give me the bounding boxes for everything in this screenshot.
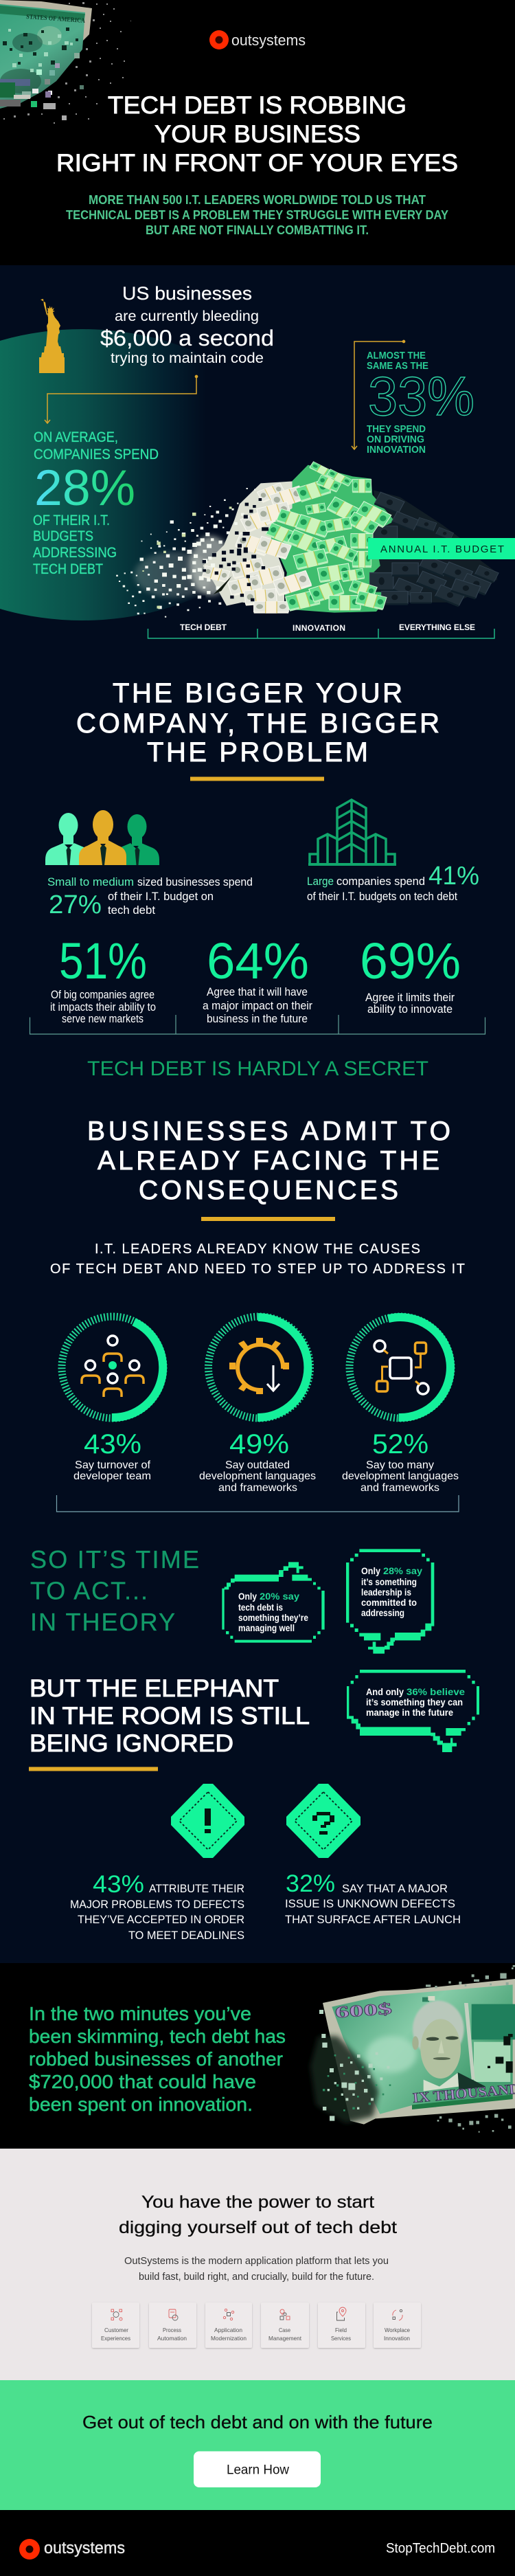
subheading: I.T. LEADERS ALREADY KNOW THE CAUSES bbox=[95, 1242, 420, 1257]
text: 27 percent: tech debt bbox=[108, 904, 155, 917]
text: 28 percent: COMPANIES SPEND bbox=[34, 447, 159, 462]
tile: case management: Management bbox=[268, 2335, 302, 2342]
stat: 49 percent outdated: and frameworks bbox=[218, 1482, 297, 1494]
text: platform description bbox=[124, 2256, 389, 2283]
heading: you have the power: You have the power to start bbox=[141, 2193, 374, 2212]
text: US businesses: US businesses bbox=[122, 283, 252, 304]
heading: so it's time to act: IN THEORY bbox=[30, 1608, 175, 1636]
text: skimming callout: robbed businesses of another bbox=[29, 2048, 283, 2070]
text: skimming callout: $720,000 that could have bbox=[29, 2071, 256, 2092]
subtitle bbox=[66, 192, 449, 237]
text: 33 percent: ON DRIVING bbox=[367, 434, 424, 445]
tile: workplace innovation: Workplace bbox=[385, 2327, 410, 2333]
icon: question diamond bbox=[286, 1784, 360, 1858]
tile: workplace innovation bbox=[374, 2303, 421, 2348]
tile: field services: Field bbox=[335, 2327, 347, 2333]
callout: only 20 percent: something they’re bbox=[238, 1612, 308, 1623]
icon: team bbox=[82, 1336, 144, 1397]
stat: 51 percent: Of big companies agree bbox=[51, 989, 154, 1001]
title bbox=[56, 92, 458, 177]
callout: only 28 percent: it’s something bbox=[361, 1576, 417, 1587]
heading: you have the power bbox=[119, 2193, 397, 2237]
stat: 43 percent turnover bbox=[62, 1317, 163, 1482]
section: budget split bbox=[0, 283, 515, 638]
subheading: OF TECH DEBT AND NEED TO STEP UP TO ADDRESS IT bbox=[50, 1262, 465, 1277]
stat: 51 percent: serve new markets bbox=[62, 1013, 144, 1025]
heading: so it's time to act bbox=[30, 1545, 199, 1636]
text: skimming callout: been skimming, tech debt has bbox=[29, 2026, 286, 2047]
image: disintegrating six thousand bill: 600$ bbox=[334, 2000, 393, 2022]
heading: so it's time to act: SO IT’S TIME bbox=[30, 1545, 199, 1573]
section: green CTA bbox=[0, 2380, 515, 2510]
text: 28 percent bbox=[33, 429, 159, 577]
heading underline bbox=[29, 1767, 158, 1771]
logo: outsystems bbox=[209, 30, 306, 49]
heading: BUSINESSES ADMIT TO bbox=[87, 1117, 450, 1146]
subtitle: BUT ARE NOT FINALLY COMBATTING IT. bbox=[146, 223, 369, 237]
image: disintegrating dollar bill: STATES OF AMERICA bbox=[26, 14, 85, 25]
logo: outsystems footer: outsystems bbox=[44, 2539, 125, 2557]
stat: 64 percent: business in the future bbox=[207, 1013, 308, 1025]
text: 28 percent: BUDGETS bbox=[33, 528, 93, 544]
button: learn how: Learn How bbox=[227, 2463, 289, 2478]
stat: 52 percent too many: development languages bbox=[342, 1470, 459, 1482]
icon: statue of liberty bbox=[39, 299, 65, 373]
tile: field services: Services bbox=[331, 2335, 351, 2342]
heading: get out of tech debt: Get out of tech debt and on with the future bbox=[82, 2412, 433, 2432]
image: disintegrating six thousand bill: IX THOUSAND bbox=[412, 2081, 515, 2106]
callout: only 28 percent: leadership is bbox=[361, 1587, 411, 1598]
heading: THE BIGGER YOUR bbox=[113, 678, 402, 708]
stat: 32 percent unknown defects: THAT SURFACE AFTER LAUNCH bbox=[285, 1913, 461, 1926]
image: disintegrating dollar bill bbox=[0, 0, 131, 124]
heading: COMPANY, THE BIGGER bbox=[76, 708, 439, 739]
title: YOUR BUSINESS bbox=[154, 121, 360, 148]
text: 27 percent bbox=[47, 875, 253, 919]
stat: 49 percent outdated: 49% bbox=[229, 1429, 289, 1459]
text: 28 percent: OF THEIR I.T. bbox=[33, 513, 110, 528]
tile: case management: Case bbox=[279, 2327, 290, 2333]
heading underline bbox=[201, 1217, 335, 1221]
logo: outsystems footer bbox=[19, 2539, 125, 2560]
portrait on bill bbox=[412, 2001, 485, 2091]
text: 41 percent: 41% bbox=[428, 862, 479, 891]
stat: 43 percent defects: TO MEET DEADLINES bbox=[128, 1929, 244, 1942]
text: 33 percent: INNOVATION bbox=[367, 445, 426, 456]
stat: 43 percent turnover: 43% bbox=[84, 1429, 141, 1459]
text: 27 percent: Small to medium bbox=[47, 875, 134, 888]
callout: only 28 percent: 28% say bbox=[383, 1565, 422, 1576]
tile: case management bbox=[261, 2303, 309, 2348]
text: platform description: OutSystems is the modern application platform that lets you bbox=[124, 2256, 389, 2267]
stat: 43 percent defects: THEY’VE ACCEPTED IN ORDER bbox=[78, 1913, 244, 1926]
callout: only 36 percent: manage in the future bbox=[366, 1707, 453, 1718]
heading: so it's time to act: TO ACT... bbox=[30, 1576, 148, 1605]
stat: 52 percent too many: and frameworks bbox=[360, 1482, 439, 1494]
stat: 64 percent: a major impact on their bbox=[203, 1000, 312, 1012]
section: call to platform bbox=[0, 2149, 515, 2380]
icon: gear with arrow bbox=[229, 1338, 289, 1394]
tile: field services bbox=[318, 2303, 365, 2348]
icon: business people bbox=[45, 810, 159, 865]
stat: 32 percent unknown defects bbox=[285, 1870, 461, 1926]
tile: application modernization: Modernization bbox=[211, 2335, 247, 2342]
stat: 64 percent bbox=[203, 932, 312, 1025]
labels: budget split bracket bbox=[148, 623, 494, 638]
callout: only 20 percent: Only bbox=[238, 1591, 257, 1602]
stat: 43 percent defects bbox=[70, 1871, 244, 1942]
text: 41 percent: companies spend bbox=[336, 875, 425, 888]
arrow: gold connector left bbox=[45, 375, 198, 423]
label: annual I.T. budget: ANNUAL I.T. BUDGET bbox=[380, 544, 504, 555]
stat: 64 percent: 64% bbox=[207, 932, 309, 989]
stat: 51 percent: 51% bbox=[59, 932, 147, 989]
stat: 69 percent bbox=[360, 932, 461, 1016]
tile: workplace innovation: Innovation bbox=[384, 2335, 410, 2342]
label: annual I.T. budget bbox=[368, 538, 515, 559]
heading: you have the power: digging yourself out of tech debt bbox=[119, 2218, 397, 2237]
text: 28 percent: ON AVERAGE, bbox=[34, 429, 118, 445]
text: US businesses: are currently bleeding bbox=[115, 309, 259, 324]
text: skimming callout: been spent on innovation. bbox=[29, 2094, 253, 2115]
text: US businesses: trying to maintain code bbox=[111, 350, 264, 366]
stat: 69 percent: ability to innovate bbox=[367, 1003, 453, 1016]
labels: budget split bracket: INNOVATION bbox=[293, 623, 345, 633]
text: 28 percent: ADDRESSING bbox=[33, 545, 117, 561]
heading: CONSEQUENCES bbox=[139, 1176, 398, 1205]
stat: 52 percent too many bbox=[342, 1317, 459, 1494]
stat: 43 percent defects: ATTRIBUTE THEIR bbox=[149, 1882, 244, 1895]
stat: 52 percent too many: 52% bbox=[372, 1429, 428, 1459]
callout: only 20 percent: 20% say bbox=[260, 1591, 299, 1602]
callout: only 36 percent: it’s something they can bbox=[366, 1696, 463, 1707]
stat: 52 percent too many: Say too many bbox=[366, 1459, 434, 1471]
stat: 49 percent outdated: Say outdated bbox=[225, 1459, 290, 1471]
heading: elephant in the room: IN THE ROOM IS STILL bbox=[30, 1703, 310, 1729]
section: consequences bbox=[50, 1117, 465, 1512]
text: 41 percent: of their I.T. budgets on tech debt bbox=[307, 890, 457, 903]
callout: only 20 percent bbox=[222, 1562, 325, 1643]
text: US businesses bbox=[100, 283, 274, 366]
section: hero bbox=[0, 0, 515, 265]
title: TECH DEBT IS ROBBING bbox=[108, 92, 407, 119]
text: 28 percent: TECH DEBT bbox=[33, 561, 103, 577]
callout: only 20 percent: tech debt is bbox=[238, 1602, 283, 1613]
text: 33 percent: THEY SPEND bbox=[367, 424, 426, 435]
stat: 69 percent: 69% bbox=[360, 932, 461, 989]
callout: only 28 percent: addressing bbox=[361, 1607, 404, 1618]
image: disintegrating six thousand bill bbox=[310, 1965, 515, 2133]
stat: 43 percent turnover: Say turnover of bbox=[75, 1459, 151, 1471]
stat: 49 percent outdated: development languages bbox=[199, 1470, 316, 1482]
text: 27 percent: sized businesses spend bbox=[137, 875, 253, 888]
text: 33 percent: ALMOST THE bbox=[367, 350, 426, 361]
callout: only 36 percent: 36% believe bbox=[407, 1686, 465, 1697]
section: footer bbox=[0, 2510, 515, 2576]
section: bigger company bbox=[30, 678, 485, 1080]
callout: only 28 percent: Only bbox=[361, 1565, 380, 1576]
text: skimming callout bbox=[29, 2003, 286, 2115]
stat: 43 percent turnover: developer team bbox=[73, 1470, 151, 1482]
labels: budget split bracket: TECH DEBT bbox=[180, 623, 227, 632]
stat: 43 percent defects: MAJOR PROBLEMS TO DEFECTS bbox=[70, 1898, 244, 1911]
stat: 64 percent: Agree that it will have bbox=[207, 986, 308, 998]
subheading bbox=[50, 1242, 465, 1277]
teal glow background bbox=[0, 329, 293, 620]
subheading: hardly a secret: TECH DEBT IS HARDLY A SECRET bbox=[87, 1057, 428, 1080]
image: pile of money bbox=[116, 462, 499, 618]
text: 33 percent: SAME AS THE bbox=[367, 361, 428, 372]
arrow: gold connector right bbox=[352, 340, 405, 449]
stat: 43 percent defects: 43% bbox=[93, 1871, 144, 1898]
text: website: StopTechDebt.com bbox=[386, 2541, 495, 2556]
stat: 69 percent: Agree it limits their bbox=[365, 992, 455, 1004]
callout: only 20 percent: managing well bbox=[238, 1622, 295, 1633]
stat: 49 percent outdated bbox=[199, 1317, 316, 1494]
tile: application modernization bbox=[205, 2303, 252, 2348]
subtitle: TECHNICAL DEBT IS A PROBLEM THEY STRUGGLE WITH EVERY DAY bbox=[66, 208, 449, 222]
stat: 51 percent bbox=[50, 932, 156, 1025]
icon: office buildings bbox=[308, 800, 396, 864]
text: 28 percent: 28% bbox=[34, 460, 135, 516]
tile: process automation: Automation bbox=[157, 2335, 187, 2342]
text: US businesses: $6,000 a second bbox=[100, 326, 274, 350]
stat: 32 percent unknown defects: 32% bbox=[286, 1870, 335, 1897]
tile: process automation bbox=[149, 2303, 196, 2348]
tile: customer experiences bbox=[92, 2303, 139, 2348]
stat: 32 percent unknown defects: ISSUE IS UNKNOWN DEFECTS bbox=[285, 1897, 455, 1910]
tile: customer experiences: Customer bbox=[104, 2327, 128, 2333]
stat: 32 percent unknown defects: SAY THAT A MAJOR bbox=[342, 1882, 448, 1895]
heading: elephant in the room: BEING IGNORED bbox=[30, 1730, 233, 1757]
text: 41 percent bbox=[307, 862, 479, 903]
icon: framework nodes bbox=[374, 1341, 428, 1394]
heading underline bbox=[190, 776, 324, 781]
section: two minutes bbox=[0, 1963, 515, 2149]
subtitle: MORE THAN 500 I.T. LEADERS WORLDWIDE TOLD US THAT bbox=[89, 192, 426, 207]
text: skimming callout: In the two minutes you’ve bbox=[29, 2003, 251, 2024]
tile: process automation: Process bbox=[163, 2327, 181, 2333]
button: learn how bbox=[194, 2452, 321, 2487]
text: 41 percent: Large bbox=[307, 875, 334, 888]
heading: THE PROBLEM bbox=[147, 737, 368, 768]
heading: elephant in the room: BUT THE ELEPHANT bbox=[30, 1675, 279, 1702]
icon: warning diamond bbox=[171, 1784, 244, 1858]
labels: budget split bracket: EVERYTHING ELSE bbox=[399, 623, 475, 632]
callout: only 28 percent: committed to bbox=[361, 1597, 417, 1608]
heading bbox=[87, 1117, 450, 1205]
heading: elephant in the room bbox=[30, 1675, 310, 1757]
text: 33 percent: 33% bbox=[368, 366, 474, 427]
tile: customer experiences: Experiences bbox=[101, 2335, 130, 2342]
callout: only 36 percent: And only bbox=[366, 1686, 404, 1697]
section: time to act bbox=[29, 1545, 479, 1942]
heading: ALREADY FACING THE bbox=[98, 1146, 439, 1176]
callout: only 36 percent bbox=[347, 1670, 479, 1752]
logo: outsystems: outsystems bbox=[231, 32, 306, 49]
heading bbox=[76, 678, 439, 768]
stat: 51 percent: it impacts their ability to bbox=[50, 1001, 156, 1013]
callout: only 28 percent bbox=[346, 1549, 434, 1654]
text: platform description: build fast, build right, and crucially, build for the future. bbox=[139, 2272, 374, 2283]
title: RIGHT IN FRONT OF YOUR EYES bbox=[56, 150, 458, 177]
tile: application modernization: Application bbox=[214, 2327, 242, 2333]
text: 27 percent: of their I.T. budget on bbox=[108, 890, 214, 903]
text: 27 percent: 27% bbox=[49, 891, 102, 919]
text: 33 percent bbox=[367, 350, 474, 456]
